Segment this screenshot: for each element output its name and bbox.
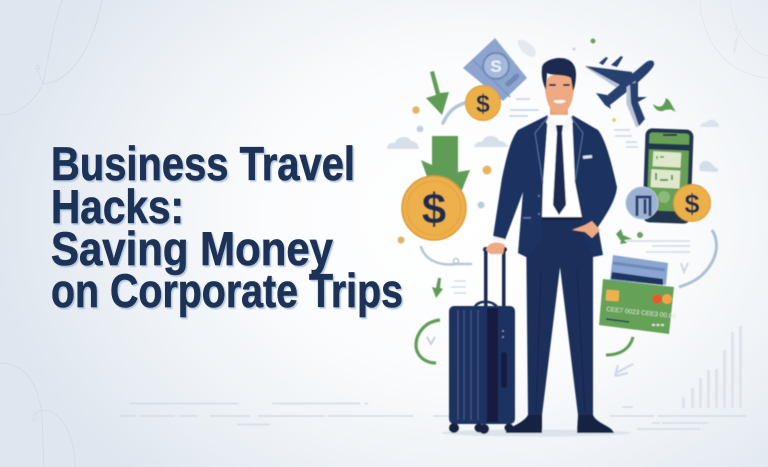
icon: small coin: $ — [476, 90, 490, 118]
icon: smartphone — [642, 128, 694, 224]
icon: banknote: S — [490, 57, 502, 76]
right hand in pocket — [572, 221, 600, 238]
head — [542, 58, 576, 114]
left cuff and hand on handle — [486, 236, 505, 254]
arrow: small green left — [616, 229, 632, 244]
shoes — [506, 415, 614, 433]
shirt — [541, 115, 583, 218]
necktie — [553, 125, 566, 215]
businessman — [486, 58, 617, 433]
icon: round blue badge — [626, 187, 658, 219]
icon: banknote — [463, 38, 539, 116]
floor shadow — [441, 430, 631, 436]
icon: large coin — [402, 176, 466, 240]
decorative baseline strokes — [120, 241, 746, 429]
neck — [550, 105, 568, 130]
arrow: pale down-left — [615, 364, 633, 376]
arrow: curved grey link — [421, 247, 471, 264]
title: Business Travel — [51, 137, 355, 190]
icon: grey circular arrow — [679, 230, 716, 287]
jacket — [493, 115, 617, 258]
title: Saving Money — [51, 222, 333, 275]
trousers — [526, 217, 593, 415]
stripes near plane — [614, 130, 638, 147]
title: Hacks: — [51, 180, 184, 233]
title: on Corporate Trips — [51, 264, 403, 317]
icon: credit cards: CEE7 0023 CEE3 00.00 — [606, 306, 677, 320]
icon: small coin — [443, 86, 500, 123]
illustration group — [387, 38, 742, 436]
suitcase — [449, 247, 515, 434]
title — [51, 137, 403, 317]
arrow: small green down — [426, 71, 449, 115]
icon: right coin: $ — [684, 189, 700, 219]
icon: green circular arrow — [416, 320, 440, 363]
arrow: green arc below card — [606, 337, 633, 355]
arrow: green swoosh — [653, 98, 676, 112]
icon: clouds and dots — [387, 38, 719, 244]
icon: airplane — [585, 56, 654, 128]
waistband — [541, 217, 584, 220]
arrow: small green and stripes — [432, 278, 466, 298]
icon: right coin — [674, 184, 710, 222]
shirt collar — [546, 116, 573, 134]
icon: credit cards — [599, 255, 677, 334]
bar chart — [682, 326, 742, 408]
arrow: large green down — [421, 136, 470, 195]
icon: large coin: $ — [422, 185, 446, 234]
